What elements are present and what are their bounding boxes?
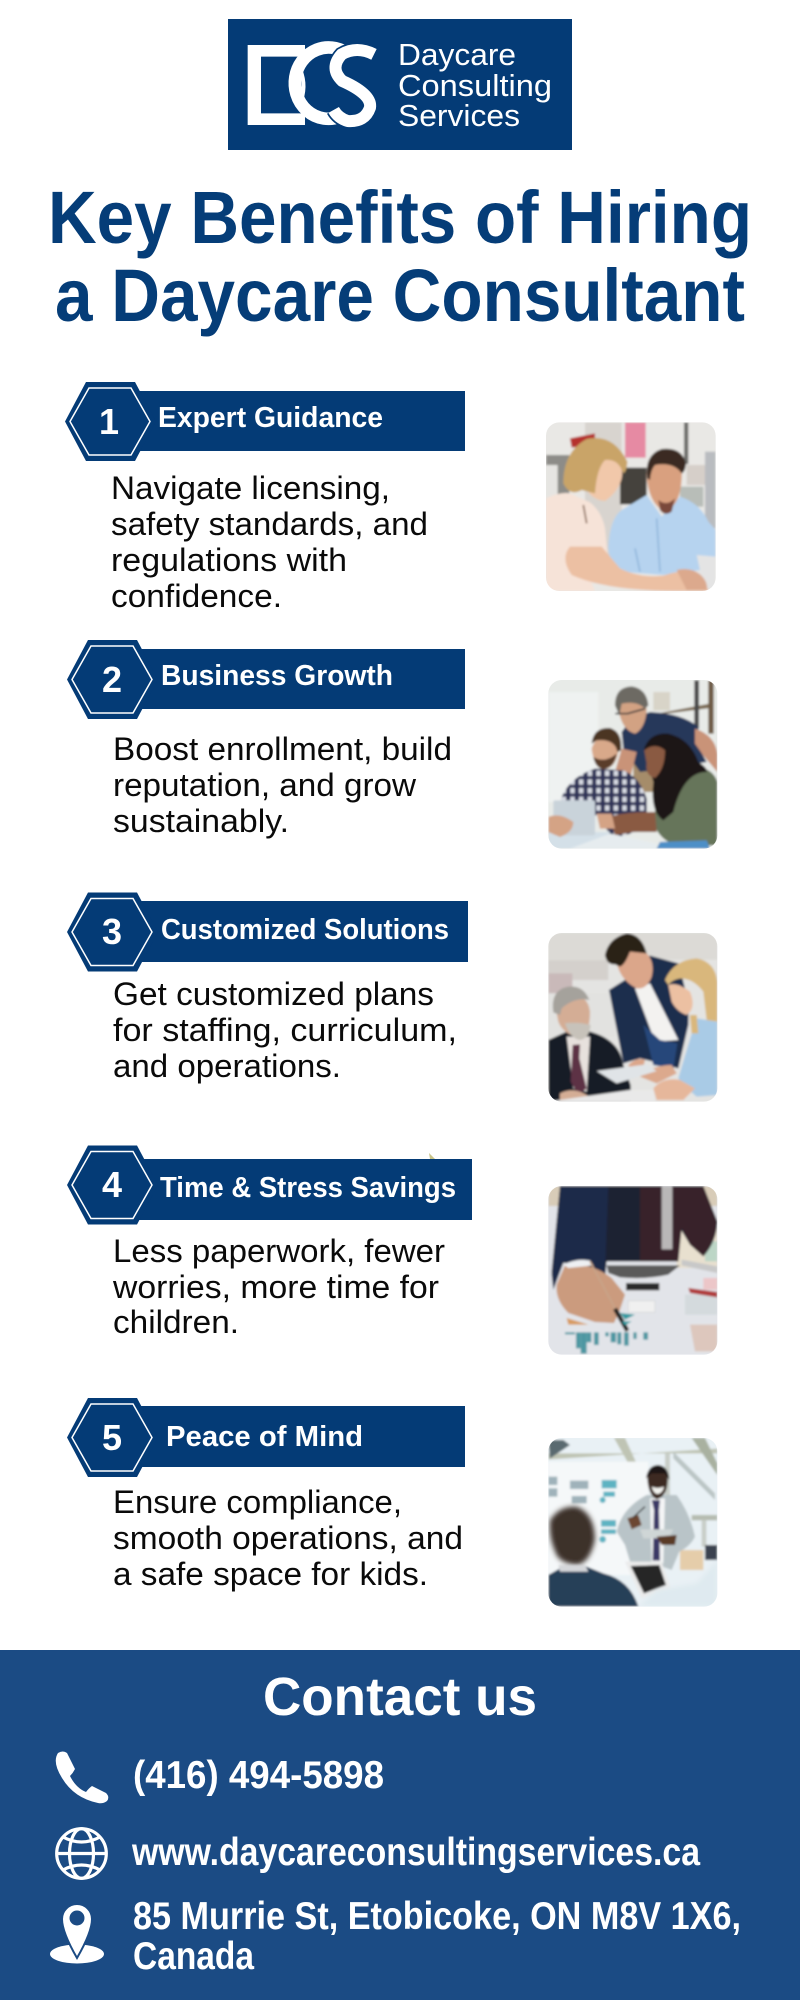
man back: [622, 712, 707, 772]
header bar 1: Expert Guidance: [158, 402, 383, 434]
description 1: Navigate licensing,: [111, 470, 390, 506]
header bar 2: [67, 640, 465, 719]
description 3: Get customized plans: [113, 976, 434, 1012]
logo wordmark: Consulting: [398, 68, 552, 103]
header bar 4: 4: [102, 1164, 122, 1205]
woman: [678, 1018, 717, 1097]
photo: hand pointing at a chart: [548, 1186, 718, 1355]
photo: three colleagues with a tablet: [548, 680, 718, 849]
photo: presenter at a whiteboard: [548, 1438, 718, 1607]
header bar 3: [67, 892, 468, 972]
panel: benefit 3: [67, 892, 725, 1110]
young man: [609, 956, 689, 1068]
header bar 3: 3: [102, 911, 122, 952]
description 2: Boost enrollment, build: [113, 731, 452, 767]
logo: [228, 19, 572, 150]
header bar 3: Customized Solutions: [161, 914, 449, 946]
laptop: [607, 1265, 680, 1278]
description 4: worries, more time for: [112, 1269, 439, 1305]
title: Key Benefits of Hiring: [48, 176, 752, 259]
logo mark: DCS monogram: [248, 45, 374, 125]
icon: globe: [57, 1829, 106, 1878]
description 1: [111, 470, 428, 614]
presenter: [617, 1495, 695, 1570]
panel: benefit 1: [65, 382, 725, 614]
header bar 1: 1: [99, 401, 119, 442]
old man: [548, 1032, 631, 1102]
description 3: for staffing, curriculum,: [113, 1012, 457, 1048]
header bar 5: 5: [102, 1417, 122, 1458]
header bar 1: [65, 382, 465, 461]
address: [133, 1895, 741, 1978]
description 1: confidence.: [111, 578, 282, 614]
header bar 2: Business Growth: [161, 660, 393, 692]
charts: [548, 1477, 588, 1503]
woman: [655, 767, 717, 845]
description 4: [112, 1233, 445, 1340]
suit: [550, 1186, 691, 1274]
header bar 4: Time & Stress Savings: [160, 1172, 456, 1204]
description 2: reputation, and grow: [113, 767, 417, 803]
description 5: Ensure compliance,: [113, 1484, 402, 1520]
title: [48, 176, 752, 337]
website: www.daycareconsultingservices.ca: [131, 1831, 700, 1874]
description 4: children.: [113, 1304, 239, 1340]
description 1: regulations with: [111, 542, 347, 578]
header bar 4: [67, 1146, 472, 1224]
decorative leaf tip: [429, 1153, 435, 1159]
woman: [546, 493, 608, 591]
audience: [548, 1567, 638, 1607]
header bar 2: 2: [102, 659, 122, 700]
description 4: Less paperwork, fewer: [113, 1233, 445, 1269]
tablet: [597, 1064, 657, 1083]
objects: [626, 1283, 659, 1290]
panel: benefit 5: [67, 1398, 725, 1615]
man: [608, 495, 716, 575]
photo: advisor with two clients: [548, 933, 718, 1102]
header bar 5: [67, 1398, 465, 1477]
logo wordmark: [398, 37, 552, 133]
logo wordmark: Services: [398, 98, 520, 133]
hand: [556, 1265, 625, 1323]
description 2: [113, 731, 452, 839]
table and tablet: [548, 832, 610, 849]
icon: phone: [56, 1752, 108, 1803]
description 3: [113, 976, 457, 1084]
address: Canada: [133, 1935, 254, 1978]
description 5: smooth operations, and: [113, 1520, 463, 1556]
photo: two colleagues at a laptop: [546, 422, 716, 591]
description 3: and operations.: [113, 1048, 341, 1084]
panel: benefit 4: [67, 1146, 725, 1363]
description 1: safety standards, and: [111, 506, 428, 542]
title: a Daycare Consultant: [55, 254, 745, 337]
panel: contact footer: [0, 1650, 800, 2000]
left man: [562, 769, 647, 839]
logo wordmark: Daycare: [398, 37, 516, 72]
description 5: [113, 1484, 463, 1592]
icon: location pin: [50, 1904, 104, 1964]
header bar 5: Peace of Mind: [166, 1421, 363, 1453]
heading: contact us: Contact us: [263, 1667, 537, 1727]
panel: benefit 2: [67, 640, 725, 857]
description 5: a safe space for kids.: [113, 1556, 428, 1592]
laptop: [626, 1560, 668, 1596]
chart: [565, 1313, 648, 1354]
phone number: (416) 494-5898: [133, 1754, 384, 1797]
description 2: sustainably.: [113, 803, 289, 839]
